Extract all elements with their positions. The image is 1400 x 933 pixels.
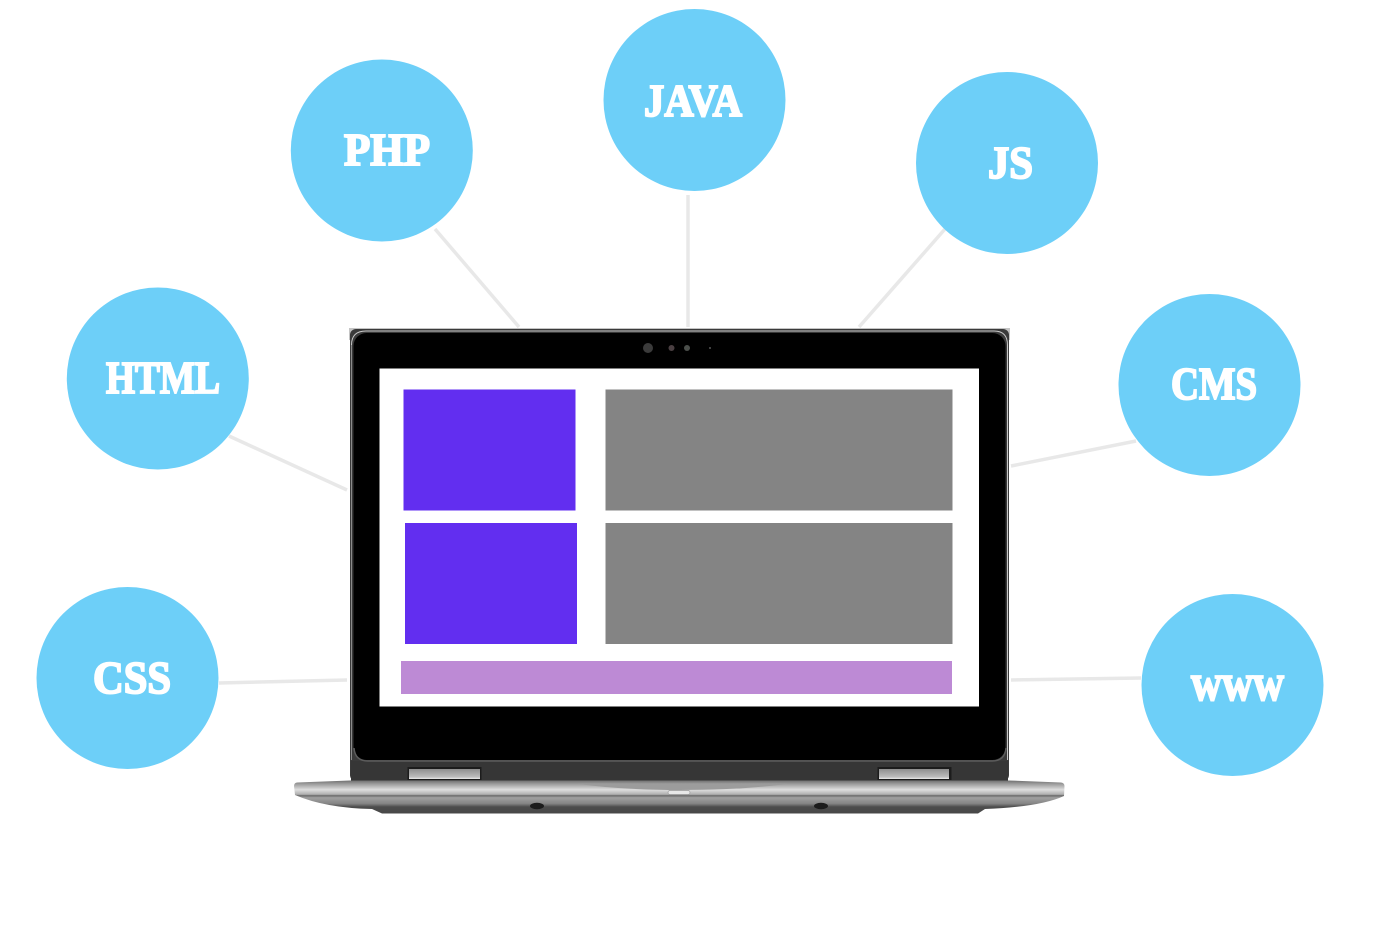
node: CSS: CSS xyxy=(93,652,171,703)
left hinge xyxy=(408,767,482,780)
node: PHP xyxy=(291,60,473,242)
screen xyxy=(380,368,979,706)
node: JAVA: JAVA xyxy=(644,75,742,126)
node: JS xyxy=(916,72,1098,254)
node: HTML xyxy=(67,288,249,470)
node: HTML: HTML xyxy=(106,352,220,403)
node: PHP: PHP xyxy=(344,124,430,175)
node: JAVA xyxy=(604,9,786,191)
node: www xyxy=(1142,594,1324,776)
gray block top xyxy=(606,390,952,510)
gray block bottom xyxy=(606,523,952,644)
laptop lid xyxy=(349,328,1010,781)
purple block top xyxy=(404,390,576,510)
right hinge xyxy=(878,767,952,780)
node: CSS xyxy=(36,587,218,769)
connector lines xyxy=(219,195,1141,683)
purple block bottom xyxy=(405,523,577,644)
laptop xyxy=(294,328,1064,814)
laptop base xyxy=(294,780,1064,814)
node: CMS: CMS xyxy=(1171,358,1257,409)
footer bar xyxy=(401,661,952,694)
webcam xyxy=(643,343,711,353)
node: www: www xyxy=(1191,655,1284,712)
node: JS: JS xyxy=(988,137,1033,188)
node: CMS xyxy=(1118,294,1300,476)
